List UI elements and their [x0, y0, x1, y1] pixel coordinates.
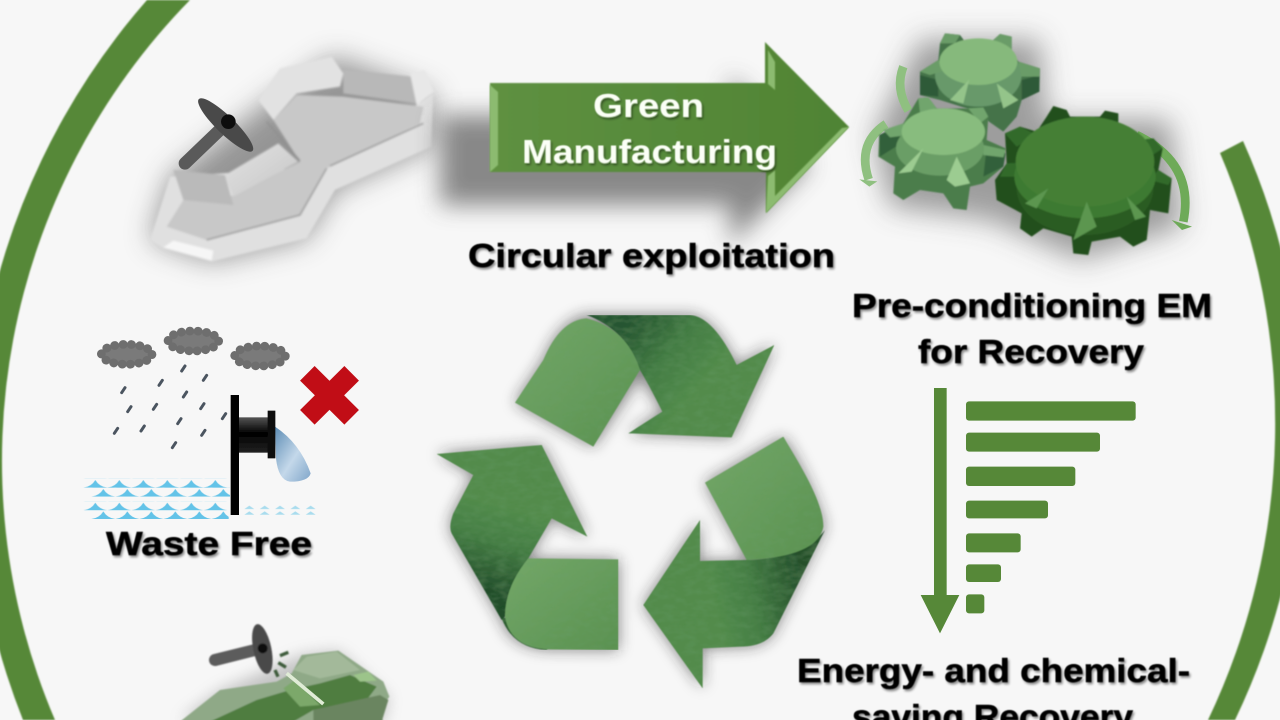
arrow shadow [440, 75, 810, 245]
impeller [185, 93, 259, 163]
rotation arrow heads [859, 179, 877, 187]
gear: top [920, 33, 1040, 132]
arrow bevel highlights [490, 50, 849, 213]
recycle arrow: top [515, 315, 774, 447]
reactor shadow [150, 57, 433, 262]
decreasing bars [966, 401, 1136, 613]
label: energy and chemical saving recovery: Energy- and chemical- [797, 652, 1190, 689]
clouds [101, 331, 285, 366]
arrow label: Green [593, 87, 704, 124]
arrow body [490, 42, 849, 213]
recycling symbol [437, 315, 825, 688]
down arrow [921, 388, 959, 633]
green reactor body [180, 651, 389, 720]
label: waste free: Waste Free [106, 525, 312, 562]
icon: grey reactor with impeller [150, 57, 434, 262]
icon: green reactor with impeller [180, 622, 389, 720]
recycle arrow: left [437, 445, 618, 650]
rain [114, 366, 226, 448]
arrow label: Manufacturing [522, 133, 777, 170]
waves: clean side [242, 504, 316, 515]
rotation arrows [865, 67, 1185, 222]
label: pre-conditioning EM for recovery: Pre-conditioning EM [852, 287, 1212, 324]
reactor body [150, 57, 434, 262]
circular ring: right arc [1208, 141, 1280, 720]
gear: front left [878, 97, 1006, 210]
circular ring: left arc [0, 0, 190, 720]
gear: large dark [995, 106, 1172, 255]
water drop [275, 427, 311, 482]
arrow label [522, 87, 777, 170]
icon: energy and chemical saving bars [921, 388, 1136, 633]
recycling shadow [437, 315, 825, 688]
icon: three green gears [859, 33, 1192, 260]
red cross [307, 373, 352, 417]
label: circular exploitation: Circular exploitation [468, 237, 835, 274]
green reactor impeller [215, 622, 288, 677]
waves: polluted side [83, 479, 230, 519]
label: energy and chemical saving recovery [797, 652, 1190, 720]
outfall pipe [231, 395, 275, 515]
label: pre-conditioning EM for recovery [852, 287, 1212, 370]
green manufacturing arrow [440, 42, 849, 245]
gear shadow [873, 40, 1183, 260]
icon: waste free water scene [83, 331, 352, 519]
label: pre-conditioning EM for recovery: for Recovery [918, 333, 1145, 370]
light band [287, 673, 323, 704]
green reactor shadow [180, 651, 388, 720]
recycle arrow: right [643, 437, 825, 688]
